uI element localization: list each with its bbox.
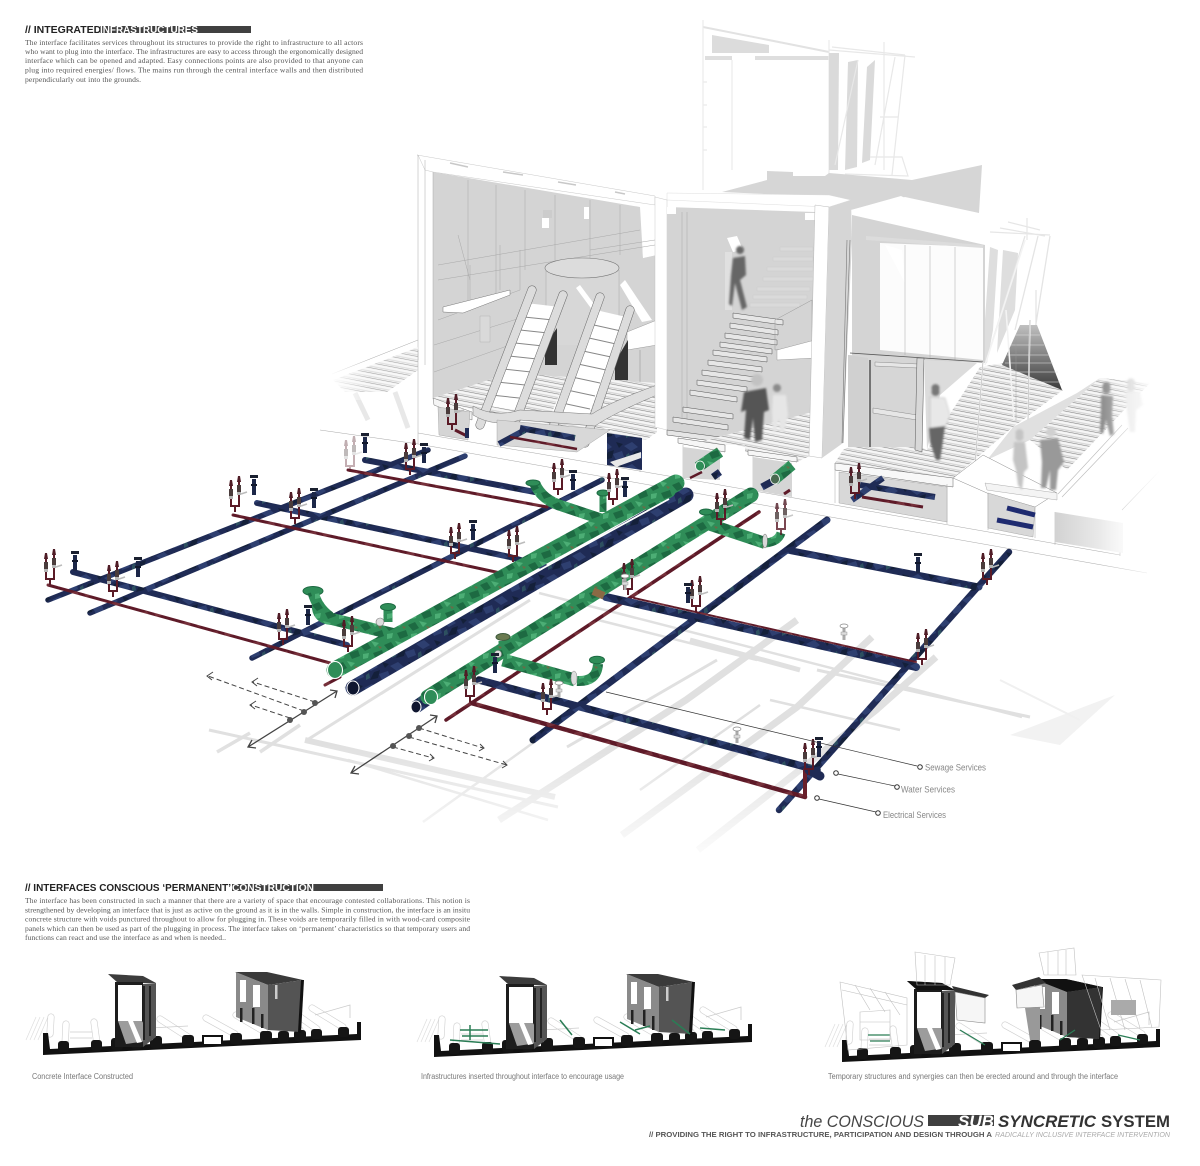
caption: concrete interface: Concrete Interface Constructed [32,1072,133,1081]
electrical services pipes (red network left) [48,470,547,685]
callout: water services: Water Services [901,784,955,794]
heading: integrated infrastructures [25,24,251,36]
subtitle [649,1130,1171,1139]
text block: construction description: functions can react and use the interface as and when is needed.. [25,933,226,942]
callout: electrical services [815,796,946,820]
building: left room with ladders and tank [417,155,657,443]
service valves right network [464,489,999,775]
subtitle: RADICALLY INCLUSIVE INTERFACE INTERVENTION [995,1130,1171,1139]
green main pipe with branches [303,480,676,678]
temporary huts [840,948,1161,1050]
arrows: expansion direction right [351,715,507,774]
green second pipe with branches [428,495,781,697]
building: upper temporary structures [703,20,1050,365]
niche: empty [1055,512,1123,553]
heading: integrated infrastructures: INFRASTRUCTURES [100,24,198,36]
heading: interfaces conscious permanent construction [25,882,383,894]
niche: green and navy pipes [683,447,720,480]
niche: services under ladders [497,420,610,452]
text block: construction description: strengthened by developing an interface that is just as active on the ground as it is in the walls. Simple in construction, the interface is an insitu [25,906,470,914]
caption: temporary structures: Temporary structures and synergies can then be erected around and through the interface [828,1072,1118,1081]
diagram: concrete interface [26,972,361,1055]
ladders [473,290,657,443]
green services inserted [450,1020,725,1044]
subtitle: // PROVIDING THE RIGHT TO INFRASTRUCTURE, PARTICIPATION AND DESIGN THROUGH A [649,1130,993,1139]
title: the conscious sub syncretic system: the CONSCIOUS [800,1112,925,1131]
main water pipes [353,495,759,720]
pipe end: green main [328,662,342,678]
pipe end: green second [424,690,438,704]
text block: infrastructure description: The interface facilitates services throughout its structures to provide the right to infrastructure to all actors [25,38,363,47]
people [729,246,1143,490]
service valves left network [44,433,629,652]
text block: construction description: panels which can then be used as part of the plugging in process. The interface takes on ‘permanent’ characteristics so that temporary users and [25,924,470,933]
niche: navy panel [607,433,642,470]
text block: infrastructure description: who want to plug into the interface. The infrastructures are easy to access through the ergonomically designed [25,47,363,56]
left deck [330,340,418,428]
main stair [750,247,813,307]
callout: sewage services [606,692,986,772]
pipe ends: navy [347,681,421,713]
caption: infrastructures inserted: Infrastructures inserted throughout interface to encourage usage [421,1072,624,1081]
arrows: expansion direction left [207,672,337,748]
text block: infrastructure description: perpendicularly out into the grounds. [25,75,141,84]
heading: integrated infrastructures: // INTEGRATED [25,24,102,36]
niche: valves [438,394,470,440]
text block: construction description: concrete structure with voids punctured throughout to allow for plugging in. These voids are temporarily filled in with wood-card composite [25,914,471,924]
building: right room with door and stair [809,200,1170,510]
title: the conscious sub syncretic system: SYSTEM [1101,1112,1170,1131]
services pipes right network [471,520,1009,810]
heading: interfaces conscious permanent construction: CONSTRUCTION [232,882,314,894]
heading: interfaces conscious permanent construction: // INTERFACES CONSCIOUS ‘PERMANENT’ [25,882,231,894]
text block: construction description: The interface has been constructed in such a manner that there are a variety of space that encourage contested collaborations. This notion is [25,896,470,905]
niche: services under right deck [839,463,947,522]
title: the conscious sub syncretic system [800,1112,1170,1131]
diagram: infrastructures inserted [417,974,752,1057]
diagram: temporary structures [825,948,1161,1062]
green services [868,1030,1140,1045]
text block: infrastructure description [25,38,363,84]
niche: pipes second [753,457,792,497]
water tank [545,258,652,345]
ground shadows of the services [209,593,1115,850]
shadow strip under pipes [345,505,668,688]
callout: electrical services: Electrical Services [883,810,946,820]
callout: sewage services: Sewage Services [925,762,986,772]
text block: infrastructure description: interface which can be opened and adapted. Easy connections points are also provided to that anyone can [25,56,363,65]
title: the conscious sub syncretic system: SUB [958,1112,994,1131]
title: the conscious sub syncretic system: SYNCRETIC [998,1112,1097,1131]
callout: water services [834,771,955,794]
niche: navy services [988,493,1035,537]
building: central room with stair [655,193,851,462]
text block: infrastructure description: plug into required energies/ flows. The mains run through the central interface walls and then distributed [25,66,363,74]
ground and plinth lines with niches [320,350,1200,600]
text block: construction description [25,896,471,942]
sewage services pipes (navy network left) [48,450,602,658]
